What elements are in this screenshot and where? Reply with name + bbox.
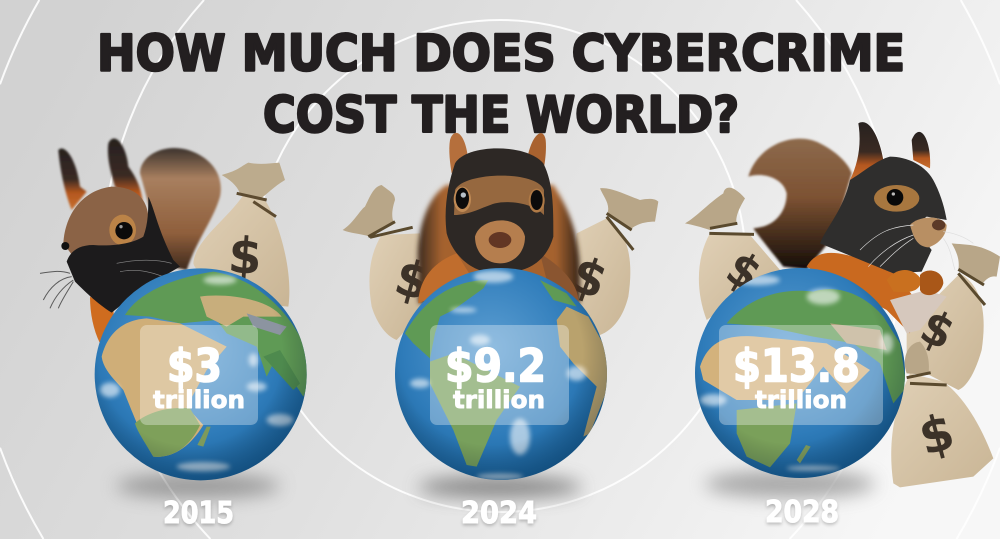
clouds bbox=[100, 275, 293, 471]
body bbox=[90, 297, 117, 343]
year labels bbox=[163, 495, 839, 531]
continents bbox=[405, 280, 488, 358]
money bag: $ bbox=[226, 226, 264, 286]
continents bbox=[727, 289, 907, 403]
left money bag: $ bbox=[717, 241, 770, 303]
year labels: 2028 bbox=[765, 495, 839, 530]
face opening bbox=[454, 176, 544, 215]
left money bag: $ bbox=[389, 248, 436, 312]
callout: $3 trillion bbox=[140, 325, 258, 425]
callout: $9.2 trillion bbox=[430, 325, 569, 425]
group: 2028 squirrel bbox=[685, 122, 1000, 487]
left money bag bbox=[685, 188, 780, 320]
ears bbox=[850, 122, 883, 182]
right money bag bbox=[563, 188, 658, 335]
title: HOW MUCH DOES CYBERCRIME bbox=[97, 24, 905, 82]
clouds bbox=[700, 275, 893, 471]
globe 2015 bbox=[95, 268, 308, 480]
callout: $13.8 trillion: trillion bbox=[755, 386, 847, 414]
mask bbox=[67, 197, 180, 313]
right money bag: $ bbox=[563, 245, 615, 311]
continents bbox=[125, 272, 308, 397]
title bbox=[97, 24, 905, 144]
muzzle bbox=[475, 220, 525, 263]
body bbox=[807, 253, 913, 333]
money bag bbox=[193, 163, 289, 307]
year labels: 2015 bbox=[163, 496, 234, 531]
head bbox=[63, 187, 148, 257]
muzzle bbox=[910, 217, 947, 247]
callout: $3 trillion: trillion bbox=[153, 386, 245, 414]
clouds bbox=[410, 271, 587, 480]
left money bag bbox=[343, 185, 436, 340]
globe 2024 bbox=[395, 268, 608, 480]
eyes bbox=[454, 187, 471, 212]
title: COST THE WORLD? bbox=[263, 86, 739, 144]
eye bbox=[874, 185, 919, 212]
bottom money bag: $ bbox=[913, 402, 960, 467]
whiskers bbox=[860, 225, 973, 270]
year labels: 2024 bbox=[461, 496, 537, 531]
bottom money bag bbox=[891, 342, 993, 487]
top-right money bag: $ bbox=[912, 300, 962, 361]
eye bbox=[109, 215, 136, 245]
paws bbox=[887, 270, 922, 292]
callout: $13.8 trillion bbox=[719, 325, 883, 425]
ears bbox=[58, 149, 87, 210]
balaclava bbox=[446, 148, 553, 273]
callout: $3 trillion: $3 bbox=[167, 340, 222, 392]
fur and body bbox=[418, 185, 580, 303]
tail bbox=[140, 148, 221, 270]
callout: $13.8 trillion: $13.8 bbox=[733, 340, 860, 392]
group: 2024 squirrel bbox=[343, 133, 658, 340]
tail bbox=[748, 139, 852, 269]
whiskers bbox=[40, 271, 73, 308]
balaclava bbox=[820, 157, 947, 273]
callout: $9.2 trillion: $9.2 bbox=[445, 340, 546, 392]
callout: $9.2 trillion: trillion bbox=[453, 386, 545, 414]
group: 2015 squirrel bbox=[40, 139, 289, 343]
ears bbox=[449, 133, 467, 173]
top-right money bag bbox=[907, 243, 1000, 390]
globe 2028 bbox=[695, 268, 907, 478]
globe shadows bbox=[116, 470, 875, 498]
